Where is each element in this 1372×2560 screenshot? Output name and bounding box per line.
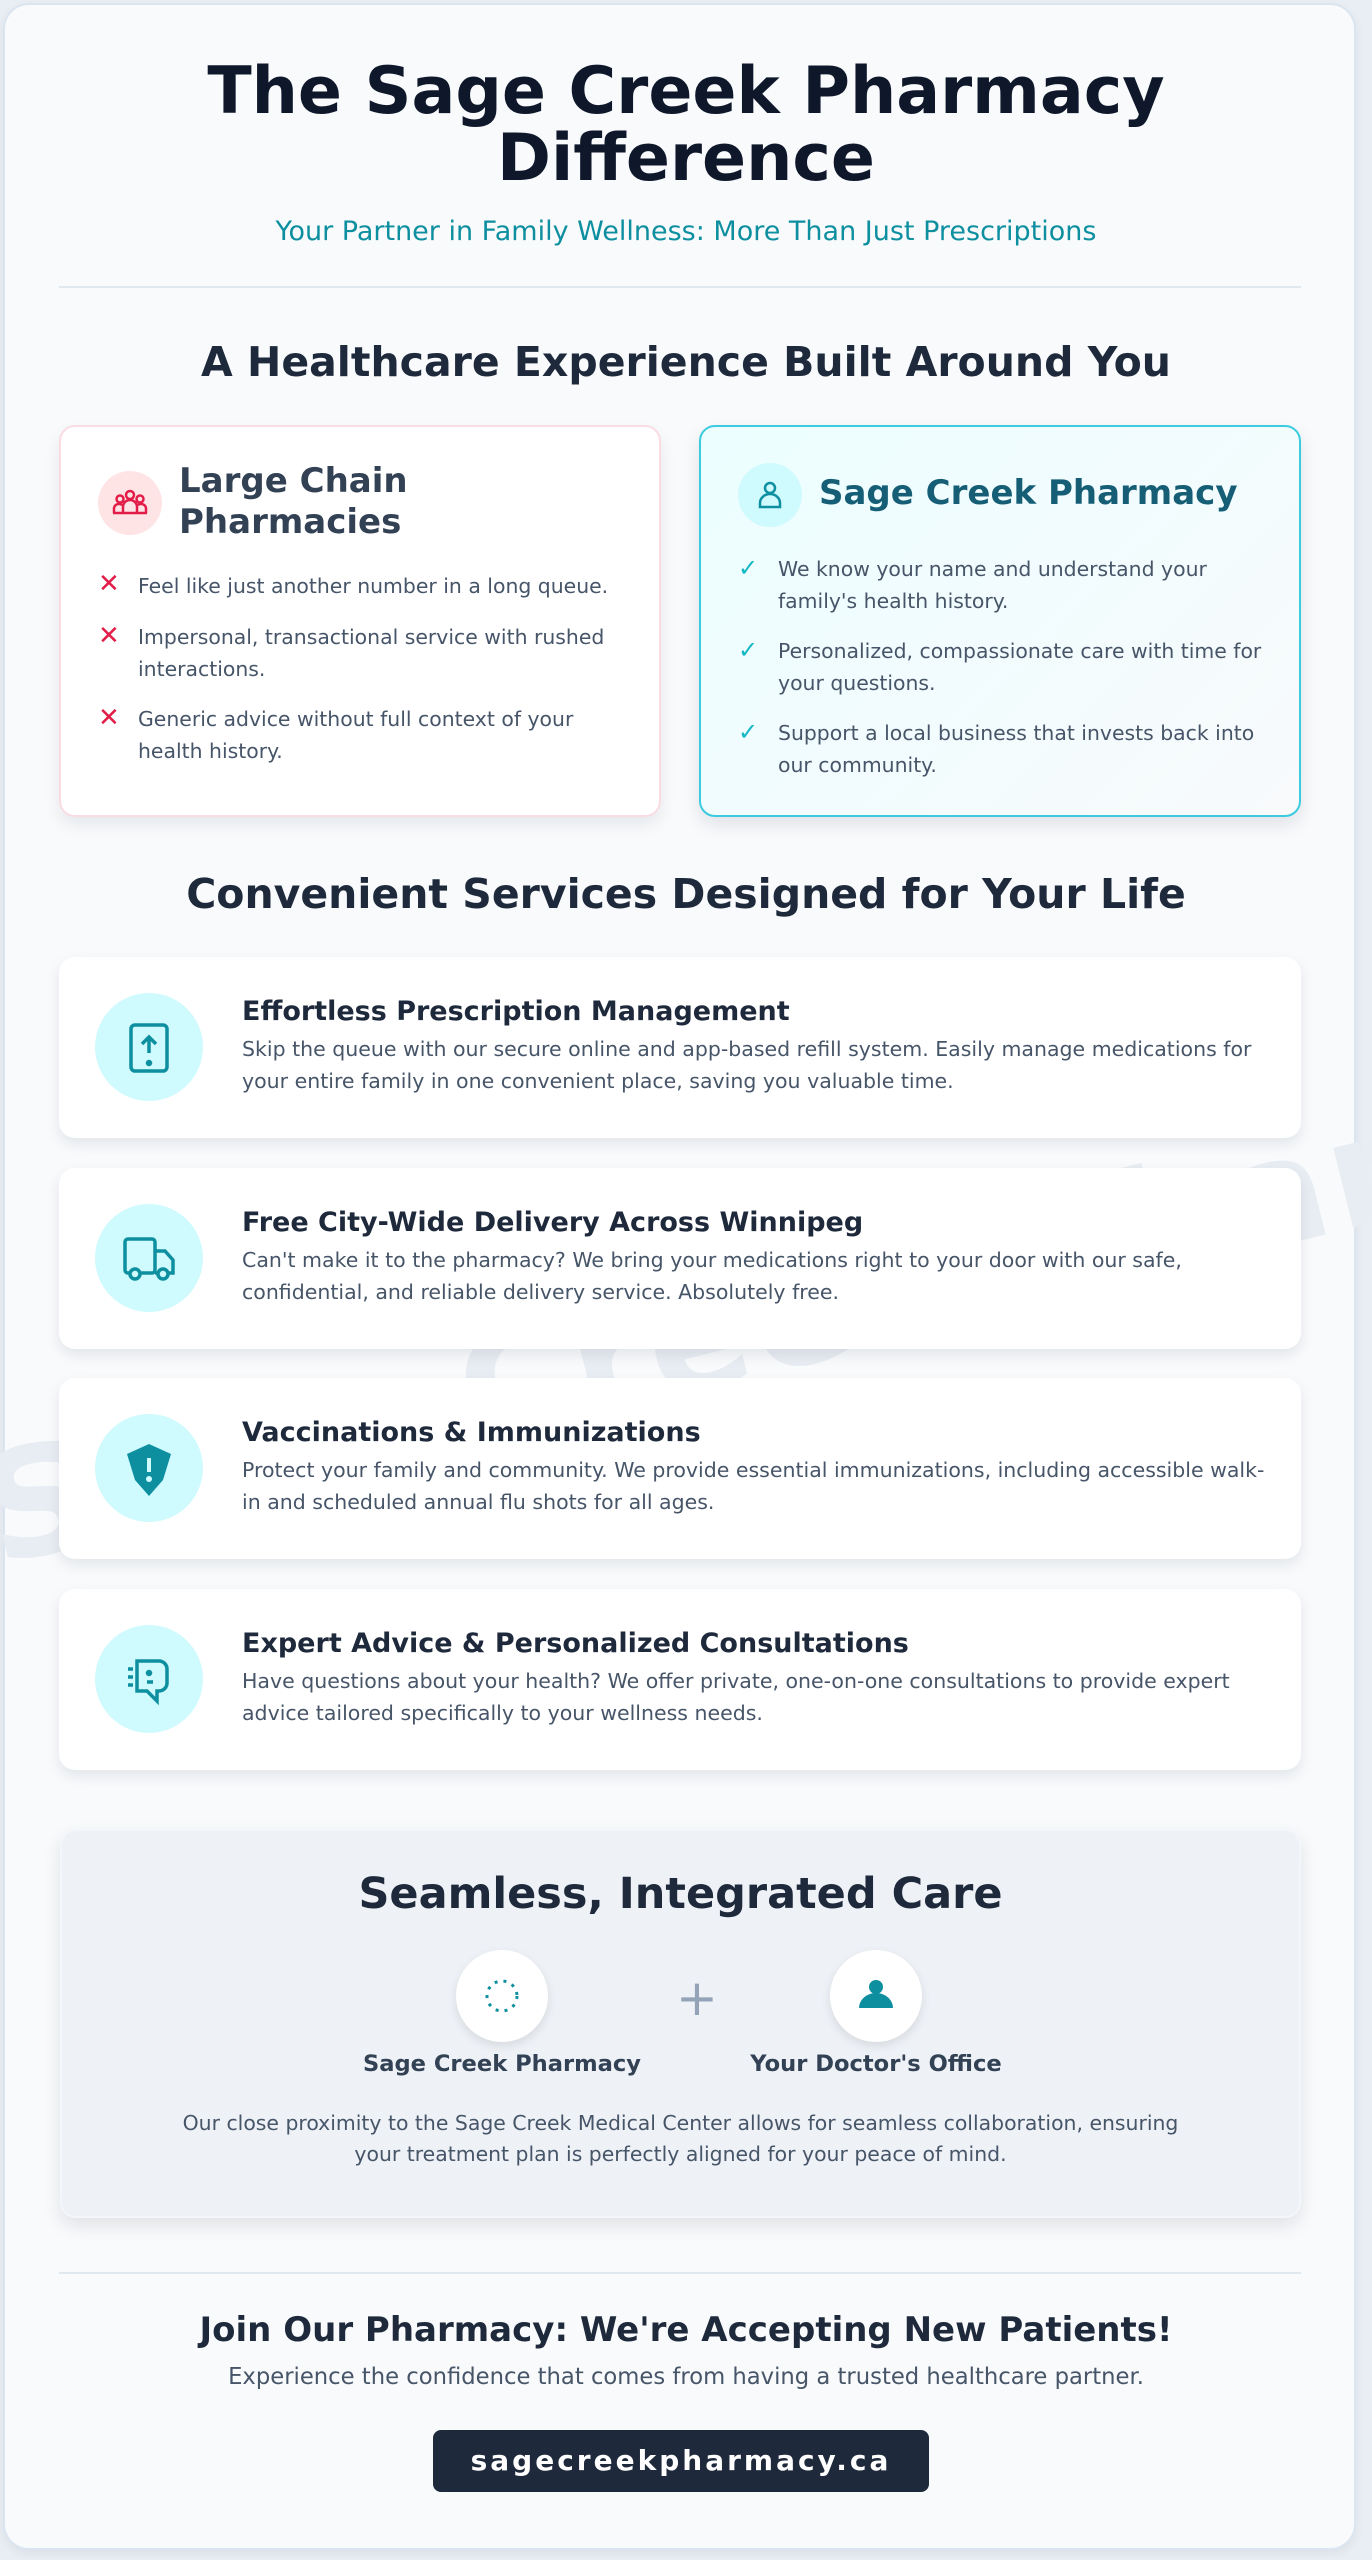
- service: prescription: Skip the queue with our secure online and app-based refill system. Easily manage medications for your entire family in one convenient place, saving you valuable time.: [242, 1037, 1251, 1093]
- panel: sage creek: [699, 425, 1301, 817]
- list: ✕: [98, 703, 120, 733]
- list: We know your name and understand your family's health history.: [778, 557, 1207, 613]
- icon: doctor: [830, 1950, 922, 2042]
- plus: +: [676, 1969, 718, 2027]
- icon: shield: [95, 1414, 203, 1522]
- list: ✕: [98, 621, 120, 651]
- card title: [179, 461, 408, 542]
- service: consultations: Have questions about your health? We offer private, one-on-one consultations to provide expert advice tailored specifically to your wellness needs.: [242, 1669, 1230, 1725]
- card title: Large Chain: [179, 461, 408, 501]
- list: Generic advice without full context of your health history.: [138, 707, 573, 763]
- icon: phone: [95, 993, 203, 1101]
- cta button: [433, 2430, 929, 2492]
- panel: integrated care: [60, 1829, 1301, 2218]
- icon: group: [98, 471, 162, 535]
- list: ✓: [738, 636, 758, 664]
- service: delivery: Free City-Wide Delivery Across Winnipeg: [242, 1207, 863, 1238]
- card title: Sage Creek Pharmacy: [819, 473, 1237, 513]
- service: consultations: Expert Advice & Personalized Consultations: [242, 1628, 909, 1659]
- list: Support a local business that invests back into our community.: [778, 721, 1254, 777]
- list: ✓: [738, 718, 758, 746]
- list: [98, 569, 608, 763]
- list: [738, 554, 1262, 777]
- title: Difference: [497, 121, 875, 196]
- title: [207, 54, 1165, 196]
- list: ✕: [98, 569, 120, 599]
- icon: truck: [95, 1204, 203, 1312]
- subtitle: Your Partner in Family Wellness: More Than Just Prescriptions: [276, 216, 1096, 247]
- service: vaccinations: Vaccinations & Immunizations: [242, 1417, 701, 1448]
- service: prescription: Effortless Prescription Management: [242, 996, 790, 1027]
- service: consultations: [59, 1589, 1301, 1770]
- icon: chat: [95, 1625, 203, 1733]
- paragraph: Our close proximity to the Sage Creek Medical Center allows for seamless collaboration, ensuring your treatment plan is perfectly aligned for your peace of mind.: [183, 2111, 1178, 2166]
- service: prescription: [59, 957, 1301, 1138]
- cta subtext: Experience the confidence that comes from having a trusted healthcare partner.: [228, 2364, 1144, 2390]
- service: delivery: [59, 1168, 1301, 1349]
- heading: services: Convenient Services Designed for Your Life: [186, 870, 1186, 918]
- heading: Seamless, Integrated Care: [358, 1869, 1003, 1919]
- list: Impersonal, transactional service with rushed interactions.: [138, 625, 604, 681]
- list: ✓: [738, 554, 758, 582]
- panel: integrated care: Your Doctor's Office: [750, 2051, 1002, 2077]
- cta heading: Join Our Pharmacy: We're Accepting New Patients!: [200, 2310, 1172, 2350]
- list: Personalized, compassionate care with time for your questions.: [778, 639, 1261, 695]
- labels: Sage Creek Pharmacy: [363, 2051, 641, 2077]
- list: Feel like just another number in a long queue.: [138, 574, 608, 598]
- cta button: sagecreekpharmacy.ca: [471, 2444, 891, 2477]
- service: vaccinations: [59, 1378, 1301, 1559]
- service: vaccinations: Protect your family and community. We provide essential immunizations, including accessible walk-in and scheduled annual flu shots for all ages.: [242, 1458, 1264, 1514]
- service: delivery: Can't make it to the pharmacy? We bring your medications right to your door with our safe, confidential, and reliable delivery service. Absolutely free.: [242, 1248, 1182, 1304]
- icon: person: [738, 463, 802, 527]
- card title: Pharmacies: [179, 502, 401, 542]
- icon: pharmacy: [456, 1950, 548, 2042]
- title: The Sage Creek Pharmacy: [207, 54, 1165, 129]
- heading: healthcare experience: A Healthcare Experience Built Around You: [201, 338, 1171, 386]
- panel: large chain: [59, 425, 661, 817]
